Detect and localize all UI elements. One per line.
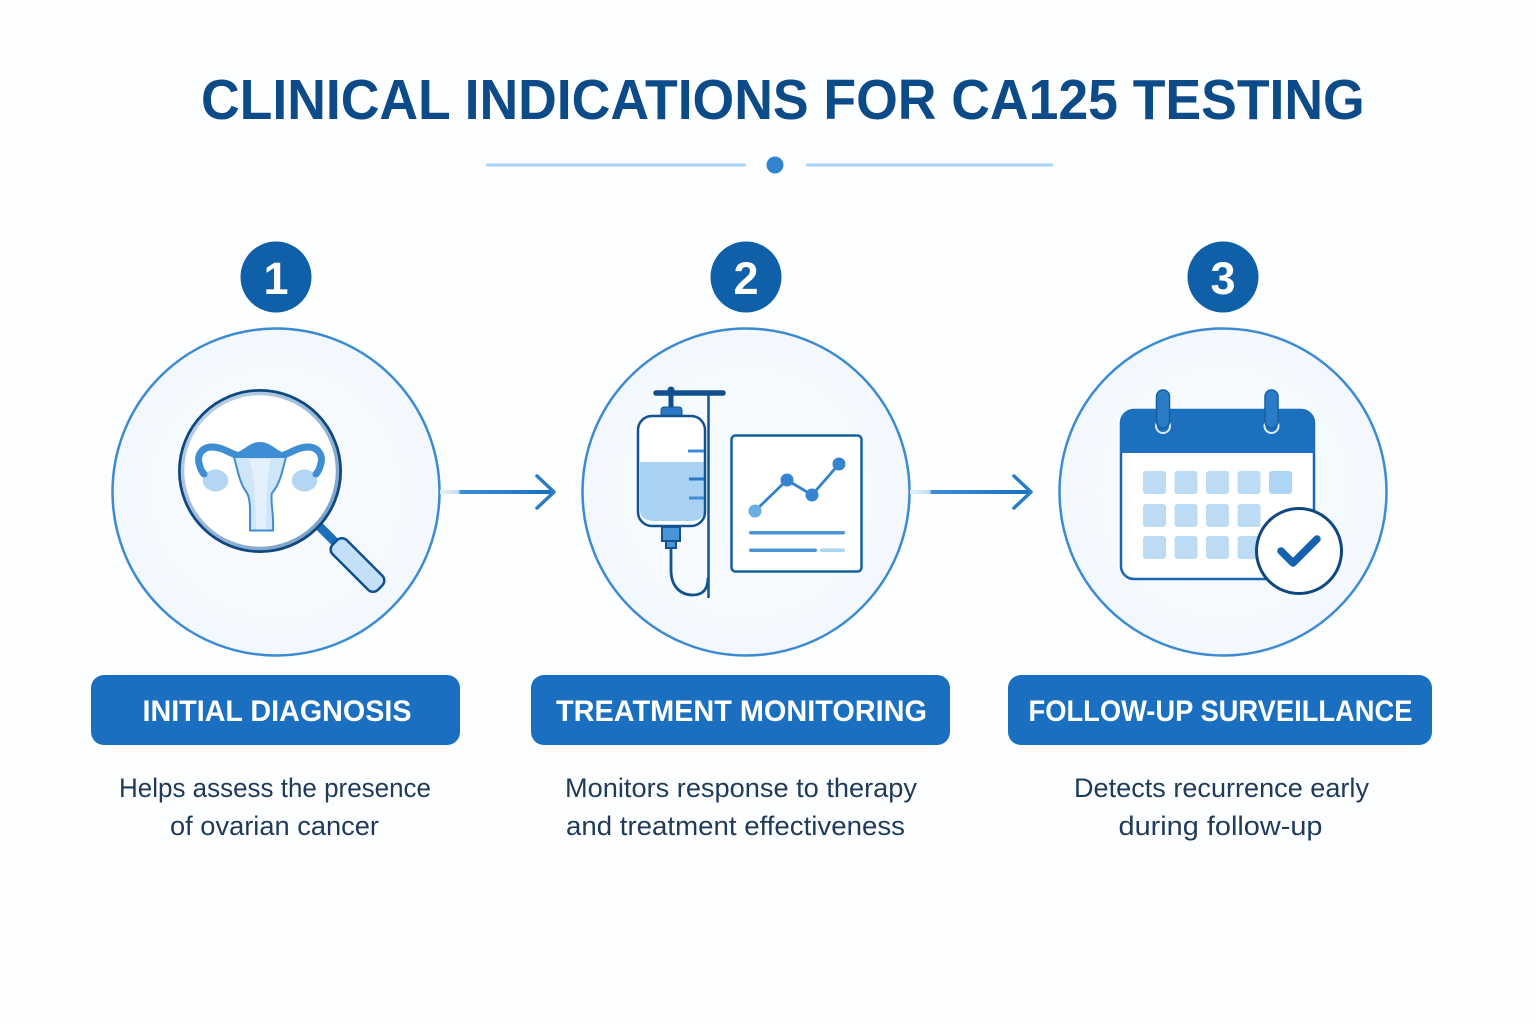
text: follow-up surveillance description <box>1074 773 1369 841</box>
icon: calendar <box>1120 390 1342 594</box>
text: follow-up surveillance description: during follow-up <box>1118 811 1322 841</box>
step 2 number badge <box>710 242 782 312</box>
text: initial diagnosis description <box>119 773 431 841</box>
step 2 number badge: 2 <box>733 253 759 304</box>
label: follow-up surveillance <box>1008 675 1432 745</box>
label: treatment monitoring <box>531 675 950 745</box>
text: treatment monitoring description <box>565 773 917 841</box>
text: treatment monitoring description: and treatment effectiveness <box>566 811 905 841</box>
step 3 number badge <box>1188 242 1258 312</box>
step 1 number badge: 1 <box>263 253 289 304</box>
text: initial diagnosis description: Helps assess the presence <box>119 773 431 803</box>
step 3 number badge: 3 <box>1210 253 1236 304</box>
label: treatment monitoring: TREATMENT MONITORING <box>556 695 927 728</box>
label: initial diagnosis: INITIAL DIAGNOSIS <box>142 695 412 728</box>
text: treatment monitoring description: Monitors response to therapy <box>565 773 917 803</box>
icon: monitoring chart <box>732 436 862 572</box>
title divider <box>486 156 1053 174</box>
icon: IV drip bag <box>638 386 723 598</box>
icon: check badge <box>1256 508 1342 594</box>
label: initial diagnosis <box>91 675 460 745</box>
text: initial diagnosis description: of ovarian cancer <box>170 811 379 841</box>
text: follow-up surveillance description: Detects recurrence early <box>1074 773 1369 803</box>
uterus anatomy <box>199 442 321 530</box>
panel: follow-up surveillance circle <box>1060 328 1386 656</box>
icon: magnifying glass over uterus <box>180 390 387 595</box>
arrow: step 2 to step 3 <box>910 476 1031 508</box>
arrow: step 1 to step 2 <box>440 476 554 508</box>
panel: initial diagnosis circle <box>112 328 440 656</box>
label: follow-up surveillance: FOLLOW-UP SURVEILLANCE <box>1028 695 1412 728</box>
step 1 number badge <box>240 242 312 312</box>
title: CLINICAL INDICATIONS FOR CA125 TESTING <box>201 67 1365 131</box>
panel: treatment monitoring circle <box>582 328 910 656</box>
